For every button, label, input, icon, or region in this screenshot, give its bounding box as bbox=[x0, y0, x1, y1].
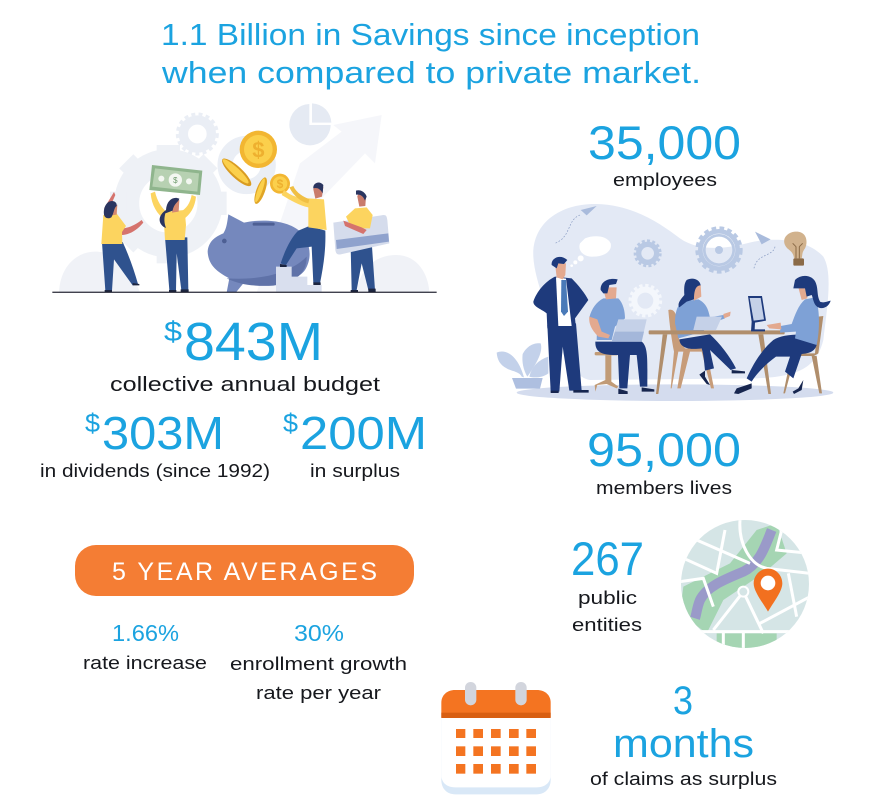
stat: employees: employees bbox=[613, 170, 717, 190]
stat: months of claims as surplus: 3 bbox=[673, 679, 693, 723]
title bbox=[161, 17, 701, 90]
stat: enrollment growth bbox=[230, 620, 407, 703]
stat: 200M surplus bbox=[283, 407, 427, 481]
stat: rate increase bbox=[83, 620, 207, 673]
stat: 303M dividends: $ bbox=[85, 408, 101, 438]
table bbox=[649, 330, 785, 394]
stat: public entities: 267 bbox=[571, 532, 644, 585]
person 2 with banknote: $ bbox=[173, 176, 178, 185]
heading pill: 5 year averages: 5 YEAR AVERAGES bbox=[112, 558, 377, 586]
stat: months of claims as surplus bbox=[590, 679, 777, 789]
piggy bank bbox=[208, 214, 310, 292]
stat: employees: 35,000 bbox=[588, 116, 741, 169]
title: 1.1 Billion in Savings since inception bbox=[161, 17, 700, 52]
stat: enrollment growth: enrollment growth bbox=[230, 654, 407, 674]
standing man bbox=[533, 257, 589, 393]
title: when compared to private market. bbox=[161, 55, 701, 90]
coins bbox=[219, 131, 290, 205]
lightbulb bbox=[784, 232, 807, 266]
ground line bbox=[52, 292, 437, 293]
stat: members lives: members lives bbox=[596, 478, 732, 498]
stat: public entities: public bbox=[578, 588, 637, 608]
paper planes and thought bubble bbox=[555, 206, 775, 268]
stat: public entities bbox=[571, 532, 644, 635]
stat: 200M surplus: in surplus bbox=[310, 461, 400, 481]
heading pill: 5 year averages bbox=[75, 545, 414, 596]
woman at monitor bbox=[734, 276, 831, 394]
icon: map with location pin bbox=[680, 519, 810, 650]
person 4 with card bbox=[333, 190, 389, 292]
stat: 843M budget bbox=[110, 312, 381, 396]
stat: 200M surplus: $ bbox=[283, 408, 299, 438]
steps bbox=[276, 267, 322, 292]
stat: members lives: 95,000 bbox=[587, 423, 741, 476]
stat: public entities: entities bbox=[572, 615, 642, 635]
plant bbox=[497, 343, 548, 389]
background blob bbox=[533, 204, 829, 380]
seated woman with laptop bbox=[668, 279, 745, 388]
stat: members lives bbox=[587, 423, 741, 498]
stat: enrollment growth: rate per year bbox=[256, 683, 381, 703]
monitor bbox=[748, 296, 766, 331]
floor bbox=[517, 384, 833, 401]
stat: 303M dividends: in dividends (since 1992) bbox=[40, 461, 270, 481]
stat: months of claims as surplus: of claims as surplus bbox=[590, 769, 777, 789]
stat: 303M dividends: 303M bbox=[102, 407, 224, 459]
stat: 843M budget: collective annual budget bbox=[110, 374, 381, 396]
illustration: team meeting at a table bbox=[497, 204, 833, 401]
gears bbox=[630, 228, 741, 316]
coins: $ bbox=[252, 137, 264, 162]
illustration: people saving money around a piggy bank bbox=[52, 103, 437, 293]
stat: months of claims as surplus: months bbox=[613, 722, 754, 766]
seated man with laptop bbox=[589, 279, 654, 394]
stat: 303M dividends bbox=[40, 407, 270, 481]
background shapes bbox=[59, 103, 429, 292]
stat: 200M surplus: 200M bbox=[300, 407, 427, 459]
stat: rate increase: rate increase bbox=[83, 653, 207, 673]
stat: 843M budget: $ bbox=[164, 316, 182, 347]
icon: calendar bbox=[441, 682, 551, 794]
stat: rate increase: 1.66% bbox=[112, 620, 179, 646]
stat: 843M budget: 843M bbox=[184, 312, 323, 372]
person 1 bbox=[101, 192, 143, 292]
stat: employees bbox=[588, 116, 741, 190]
person 2 with banknote bbox=[149, 165, 202, 292]
person 3 on steps bbox=[280, 183, 327, 285]
stat: enrollment growth: 30% bbox=[294, 620, 344, 646]
coins: $ bbox=[277, 177, 284, 191]
